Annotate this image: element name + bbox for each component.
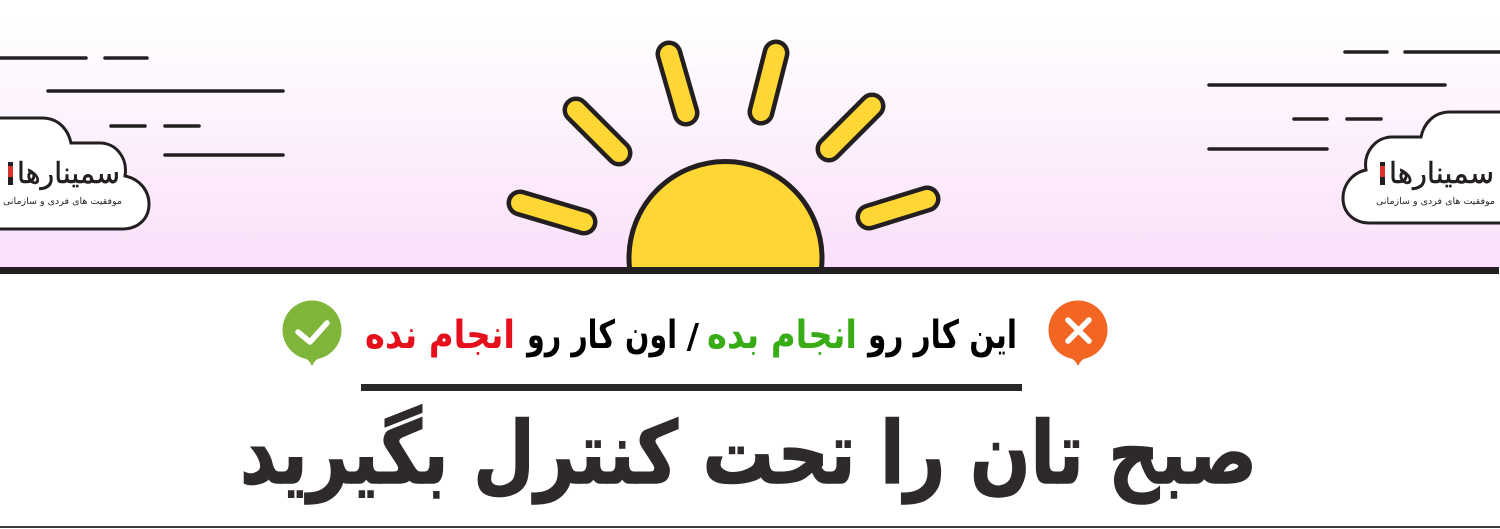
speed lines left xyxy=(0,58,283,155)
subheading: اون کار رو xyxy=(526,313,677,358)
icon: orange cross badge xyxy=(1048,300,1108,366)
icon: green check badge xyxy=(282,300,342,366)
cloud shape left xyxy=(0,118,149,229)
logo mark right xyxy=(1380,162,1385,185)
bottom rule xyxy=(0,526,1500,528)
divider under subheading xyxy=(361,384,1022,391)
right cloud logo xyxy=(1343,112,1500,223)
sun rays fill xyxy=(520,53,927,222)
subheading: انجام بده xyxy=(707,313,857,358)
panel: pink sky background xyxy=(0,15,1500,267)
logo name right: سمینارها xyxy=(1389,156,1494,190)
icon: sun xyxy=(506,40,940,267)
logo mark left xyxy=(8,162,13,185)
speed lines right xyxy=(1209,52,1500,149)
subheading: / xyxy=(687,317,700,357)
sun disc xyxy=(626,159,824,267)
subheading: انجام نده xyxy=(365,313,515,358)
subheading xyxy=(365,313,1017,358)
cloud shape right xyxy=(1343,112,1500,223)
left cloud logo xyxy=(0,118,149,229)
sun rays outline xyxy=(520,53,927,222)
horizon bar xyxy=(0,267,1499,274)
logo name left: سمینارها xyxy=(17,156,120,190)
logo tagline left: موفقیت های فردی و سازمانی xyxy=(3,197,122,207)
subheading: این کار رو xyxy=(866,313,1017,358)
logo tagline right: موفقیت های فردی و سازمانی xyxy=(1376,197,1495,207)
main title: صبح تان را تحت کنترل بگیرید xyxy=(240,404,1257,504)
